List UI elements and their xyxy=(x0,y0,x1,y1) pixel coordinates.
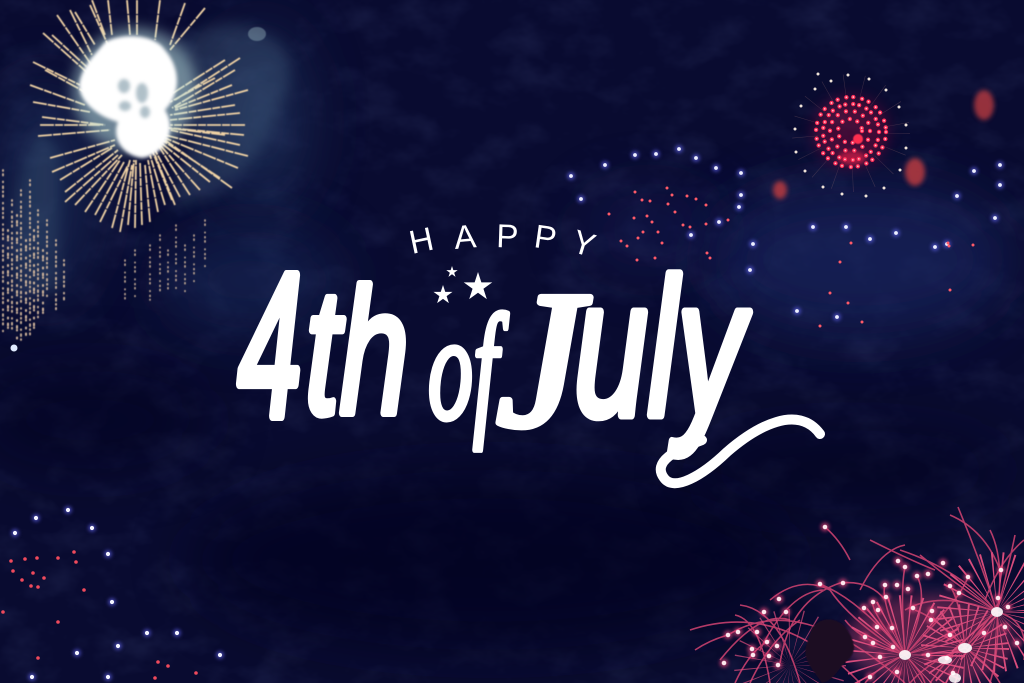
firework: gold and white burst top left xyxy=(3,0,290,352)
heading: 4th of July: uly xyxy=(574,240,750,457)
spokes xyxy=(805,87,897,179)
firework: blue and red sparks bottom left xyxy=(3,510,220,678)
heading: 4th of July: J xyxy=(496,252,591,468)
falling sparks xyxy=(3,170,205,340)
white outer sparks xyxy=(795,74,906,196)
heading: HAPPY: P xyxy=(532,217,559,257)
heading: 4th of July: of xyxy=(428,285,509,451)
heading: HAPPY: A xyxy=(452,217,478,256)
heading: 4th of July: th xyxy=(305,252,409,451)
pink trails xyxy=(690,507,1024,683)
heading: HAPPY xyxy=(406,217,600,264)
firework: pink burst bottom right xyxy=(690,507,1024,683)
rays xyxy=(30,0,248,232)
heading: HAPPY: Y xyxy=(568,222,600,264)
flourish: y tail xyxy=(661,420,820,483)
heading: 4th of July xyxy=(238,232,750,468)
icon: three stars xyxy=(433,266,492,303)
pink glow dots xyxy=(724,527,1017,677)
firework: blue and red sparks centre right xyxy=(571,149,1000,326)
glow xyxy=(73,28,197,152)
red dots xyxy=(816,97,886,167)
firework: red burst top right xyxy=(773,74,994,199)
dense radial rays xyxy=(762,582,1024,683)
dark silhouette xyxy=(805,619,854,683)
title lettering xyxy=(238,217,820,483)
heading: 4th of July: 4 xyxy=(238,232,302,460)
core xyxy=(79,36,177,158)
heading: HAPPY: H xyxy=(406,220,437,261)
smoke puffs xyxy=(974,90,994,120)
smoke xyxy=(170,24,290,210)
heading: HAPPY: P xyxy=(496,217,519,255)
